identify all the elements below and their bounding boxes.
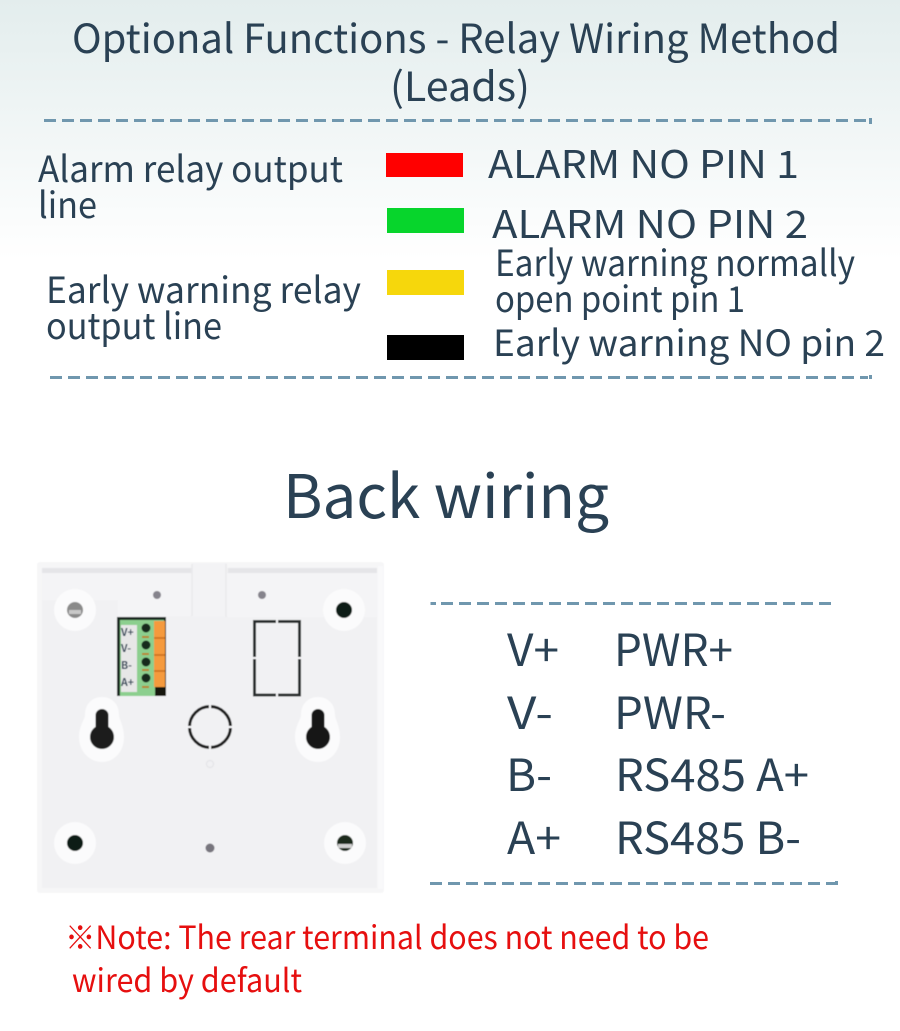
note: wired by default (72, 956, 302, 1002)
knockout window (252, 619, 302, 697)
device photo: back plate (37, 562, 384, 893)
terminal block: A+ (120, 675, 134, 690)
swatch: black (387, 335, 464, 360)
title (72, 7, 840, 113)
wiring table: PWR- (614, 678, 726, 742)
label: early warning pin 1 (495, 235, 855, 323)
screw posts (54, 589, 96, 631)
divider middle (50, 375, 870, 379)
swatch: yellow (387, 270, 464, 295)
center knockout ring (190, 706, 230, 748)
wiring table: RS485 B- (615, 803, 801, 867)
wiring table (506, 615, 809, 867)
wiring table: B- (506, 740, 552, 804)
swatch: red (386, 153, 463, 177)
keyhole right (295, 697, 340, 762)
relay group label: early warning (46, 262, 361, 350)
relay group label: alarm (38, 141, 343, 229)
terminal block (117, 617, 166, 696)
top clips (42, 573, 192, 616)
title: (Leads) (390, 55, 530, 113)
label: alarm pin 1: ALARM NO PIN 1 (488, 134, 799, 189)
wiring table top divider (430, 602, 831, 605)
wiring table: V+ (507, 615, 559, 679)
swatch: green (387, 208, 464, 233)
label: early warning pin 2: Early warning NO pin 2 (493, 315, 885, 367)
terminal block: B- (121, 658, 132, 673)
divider top (44, 118, 870, 124)
wiring table: PWR+ (614, 615, 733, 679)
keyhole left (79, 697, 124, 762)
heading: back wiring: Back wiring (283, 449, 609, 536)
wiring table: RS485 A+ (615, 740, 809, 804)
relay group label: early warning: Early warning relay (46, 262, 361, 314)
label: alarm pin 2: ALARM NO PIN 2 (492, 194, 808, 249)
wiring table bottom divider (430, 881, 836, 885)
relay group label: alarm: Alarm relay output (38, 141, 343, 193)
wiring table: V- (507, 678, 553, 742)
relay group label: early warning: output line (46, 298, 222, 350)
label: early warning pin 1: Early warning normally (495, 235, 855, 287)
note (65, 913, 709, 1002)
wiring table: A+ (507, 803, 561, 867)
relay group label: alarm: line (38, 177, 97, 229)
label: early warning pin 1: open point pin 1 (495, 271, 745, 323)
note: ※Note: The rear terminal does not need to be (65, 913, 709, 959)
title: Optional Functions - Relay Wiring Method (72, 7, 840, 65)
terminal block: V+ (120, 625, 134, 640)
terminal block: V- (120, 641, 131, 656)
